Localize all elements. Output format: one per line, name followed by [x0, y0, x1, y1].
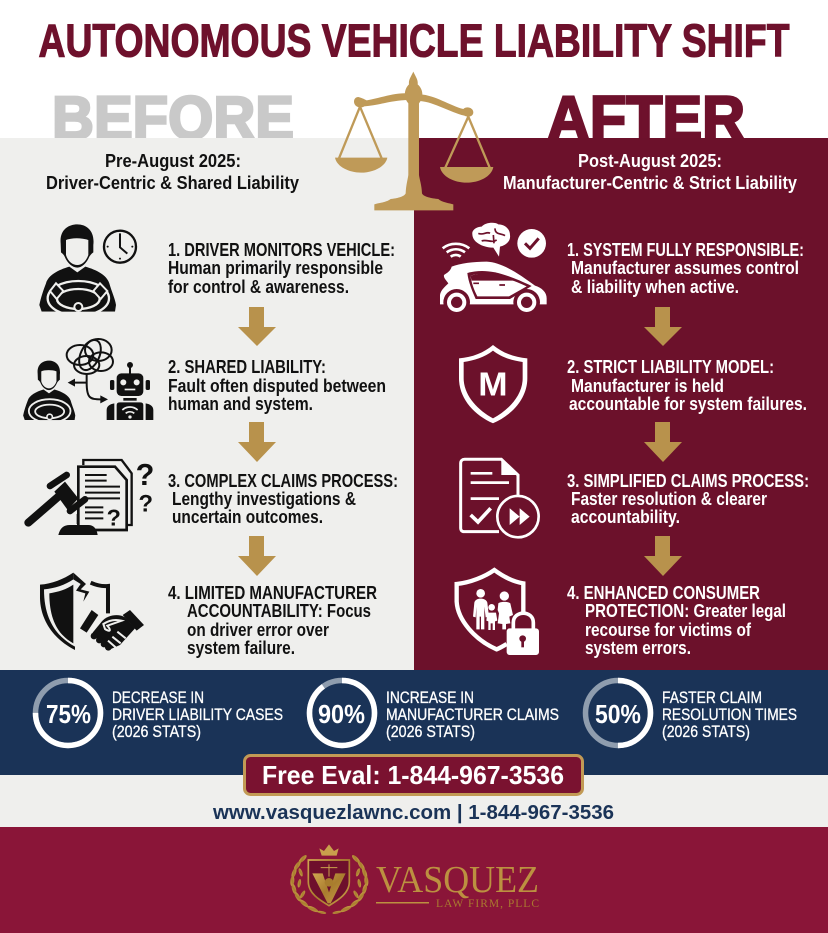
text: enhanced consumer protection: recourse for victims of	[585, 620, 752, 640]
text: complex claims process	[168, 471, 398, 527]
heading: after: AFTER	[547, 84, 745, 154]
text: shared liability: human and system.	[168, 394, 313, 414]
panel: after	[414, 138, 828, 670]
text: limited manufacturer accountability: ACCOUNTABILITY: Focus	[187, 601, 371, 621]
stat: 50%: (2026 STATS)	[662, 723, 750, 741]
band: logo footer	[0, 827, 828, 933]
stat: 90%: (2026 STATS)	[386, 723, 475, 741]
text: limited manufacturer accountability: system failure.	[187, 638, 295, 658]
arrow	[238, 307, 276, 346]
icon: shield with family and lock	[457, 570, 539, 655]
stat: 75%: DECREASE IN	[112, 689, 204, 707]
text: enhanced consumer protection: system errors.	[585, 638, 691, 658]
text: enhanced consumer protection	[567, 583, 786, 658]
text: strict liability model	[567, 357, 807, 414]
icon: document with check and fast-forward clock	[461, 459, 539, 537]
icon: gavel and documents	[28, 458, 154, 535]
subheading: before	[46, 151, 299, 193]
stat: 50%: 50%	[595, 699, 641, 729]
text: driver monitors vehicle: 1. DRIVER MONITORS VEHICLE:	[168, 240, 395, 260]
icon: scales of justice	[335, 72, 493, 210]
arrow	[238, 536, 276, 576]
stat: 90%: INCREASE IN	[386, 689, 474, 707]
icon: gavel and documents: ?	[138, 490, 153, 517]
stat: 50%: FASTER CLAIM	[662, 689, 762, 707]
stat: 90%	[310, 680, 559, 746]
stat: 75%: DRIVER LIABILITY CASES	[112, 706, 283, 724]
text: driver monitors vehicle: Human primarily responsible	[168, 258, 383, 278]
contact line: www.vasquezlawnc.com | 1-844-967-3536	[212, 802, 614, 824]
icon: gavel and documents: ?	[136, 458, 154, 492]
text: complex claims process: uncertain outcomes.	[172, 507, 323, 527]
subheading: before: Pre-August 2025:	[105, 151, 241, 171]
icon: shield with M	[459, 345, 527, 423]
stat: 90%: 90%	[318, 699, 365, 729]
stat: 75%	[36, 680, 283, 746]
text: complex claims process: 3. COMPLEX CLAIMS PROCESS:	[168, 471, 398, 491]
text: driver monitors vehicle: for control & awareness.	[168, 277, 349, 297]
stat: 50%	[586, 680, 797, 746]
icon: shield with M: M	[478, 366, 508, 403]
text: limited manufacturer accountability	[168, 583, 377, 658]
text: complex claims process: Lengthy investigations &	[172, 489, 356, 509]
logo: Vasquez Law Firm: LAW FIRM, PLLC	[436, 898, 539, 910]
text: simplified claims process	[567, 471, 809, 527]
icon: broken shield and handshake	[40, 573, 144, 651]
text: shared liability: 2. SHARED LIABILITY:	[168, 357, 326, 377]
panel: before	[0, 138, 416, 670]
subheading: before: Driver-Centric & Shared Liability	[46, 173, 299, 193]
arrow	[644, 422, 682, 462]
text: shared liability: Fault often disputed between	[168, 376, 386, 396]
stat: 75%: 75%	[46, 699, 91, 729]
text: simplified claims process: accountability.	[571, 507, 680, 527]
icon: gavel and documents: ?	[107, 504, 121, 530]
text: enhanced consumer protection: PROTECTION: Greater legal	[585, 601, 786, 621]
stat: 90%: MANUFACTURER CLAIMS	[386, 706, 559, 724]
stats band	[0, 670, 828, 775]
heading: before: BEFORE	[52, 84, 294, 152]
text: system fully responsible	[567, 240, 804, 297]
text: limited manufacturer accountability: 4. LIMITED MANUFACTURER	[168, 583, 377, 603]
text: driver monitors vehicle	[168, 240, 395, 297]
arrow	[644, 536, 682, 576]
subheading: after: Manufacturer-Centric & Strict Liability	[503, 173, 797, 193]
logo emblem	[290, 844, 369, 914]
subheading: after: Post-August 2025:	[578, 151, 722, 171]
text: strict liability model: 2. STRICT LIABILITY MODEL:	[567, 357, 774, 377]
text: strict liability model: Manufacturer is held	[571, 376, 724, 396]
logo: Vasquez Law Firm	[290, 844, 539, 914]
text: enhanced consumer protection: 4. ENHANCED CONSUMER	[567, 583, 760, 603]
icon: driver with clock	[37, 224, 136, 316]
text: limited manufacturer accountability: on driver error over	[187, 620, 329, 640]
stat: 75%: (2026 STATS)	[112, 723, 201, 741]
arrow	[644, 307, 682, 346]
icon: car with wifi, brain and check	[440, 223, 547, 316]
text: shared liability	[168, 357, 386, 414]
subheading: after	[503, 151, 797, 193]
text: system fully responsible: & liability when active.	[571, 277, 739, 297]
stat: 50%: RESOLUTION TIMES	[662, 706, 797, 724]
call to action button: Free Eval: 1-844-967-3536	[262, 760, 564, 790]
text: simplified claims process: Faster resolution & clearer	[571, 489, 767, 509]
logo: Vasquez Law Firm: VASQUEZ	[376, 859, 539, 901]
arrow	[238, 422, 276, 462]
icon: driver, robot and tangled dispute	[21, 337, 153, 423]
text: system fully responsible: Manufacturer assumes control	[571, 258, 799, 278]
band: contact	[0, 775, 828, 827]
